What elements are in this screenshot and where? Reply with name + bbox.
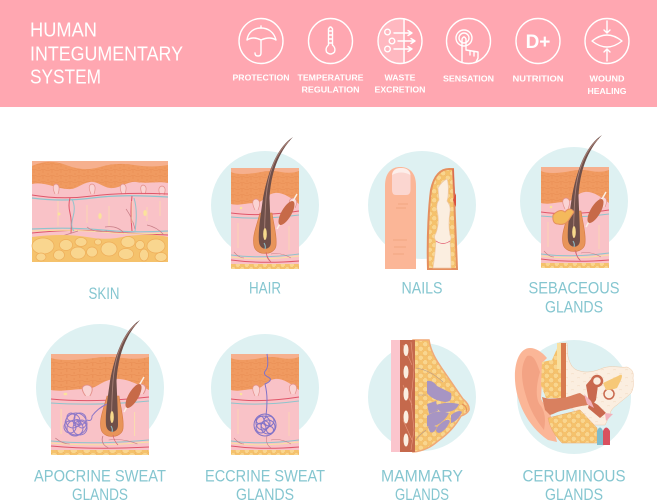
label: nails: NAILS: [402, 278, 442, 298]
icon: thermometer: [308, 18, 352, 64]
label: mammary glands: MAMMARY: [381, 467, 463, 486]
label: temperature regulation: REGULATION: [302, 84, 360, 94]
breast fat: [413, 340, 469, 452]
label: wound healing: HEALING: [588, 86, 627, 96]
panel: skin illustration: [32, 161, 168, 262]
nail: [392, 168, 410, 195]
finger exterior: [385, 167, 416, 269]
title: [30, 20, 183, 88]
label: protection: PROTECTION: [232, 72, 290, 82]
label: eccrine sweat glands: ECCRINE SWEAT: [205, 466, 325, 486]
title: INTEGUMENTARY: [30, 44, 183, 66]
label: temperature regulation: TEMPERATURE: [298, 72, 364, 82]
panel: hair illustration: [211, 137, 319, 269]
icon: wound healing: [585, 18, 629, 64]
finger cross-section: [428, 169, 457, 269]
pinna: [515, 348, 557, 442]
milk lobes: [427, 381, 462, 433]
label: temperature regulation: [298, 72, 364, 94]
eardrum: [584, 394, 594, 408]
upper fat: [541, 344, 563, 398]
bones: [433, 179, 451, 268]
semicircular canals: [592, 376, 602, 386]
papillae: [53, 184, 165, 195]
label: apocrine sweat glands: [34, 466, 166, 500]
stratum corneum: [32, 161, 168, 169]
label: eccrine sweat glands: [205, 466, 325, 500]
label: waste excretion: EXCRETION: [374, 84, 426, 94]
label: ceruminous glands: CERUMINOUS: [522, 467, 626, 486]
icon: protection umbrella: [239, 18, 283, 64]
panel: nails illustration: [368, 151, 476, 269]
panel: apocrine sweat glands illustration: [36, 320, 164, 455]
panel: sebaceous glands illustration: [520, 135, 628, 268]
label: apocrine sweat glands: APOCRINE SWEAT: [34, 466, 166, 486]
label: ceruminous glands: [522, 467, 626, 500]
epidermis layer: [32, 161, 168, 189]
icon: nutrition D+: [516, 18, 560, 64]
fat layer: [32, 235, 168, 262]
label: wound healing: WOUND: [590, 74, 624, 84]
label: nutrition: NUTRITION: [512, 74, 564, 84]
panel: eccrine sweat glands illustration: [211, 334, 319, 455]
blood vessels: [32, 193, 168, 235]
label: wound healing: [588, 74, 627, 96]
chest muscle: [400, 340, 415, 452]
panel: ceruminous glands illustration: [515, 340, 633, 454]
title: HUMAN: [30, 20, 97, 42]
icon: nutrition D+: D+: [526, 32, 550, 53]
label: sebaceous glands: SEBACEOUS: [528, 278, 620, 298]
skin strip: [391, 340, 400, 452]
sweat duct and coil: [254, 354, 276, 436]
temporal bone: [559, 343, 633, 425]
title: SYSTEM: [30, 66, 101, 88]
label: sebaceous glands: [528, 278, 620, 316]
label: hair: HAIR: [249, 278, 281, 298]
label: skin: SKIN: [88, 284, 120, 303]
lower fat: [548, 410, 597, 443]
label: sensation: SENSATION: [443, 74, 494, 84]
nail bed: [453, 169, 455, 205]
panel: mammary glands illustration: [368, 340, 476, 452]
blood vessels: [597, 428, 603, 445]
sebaceous gland: [553, 209, 574, 224]
hair roots: [58, 201, 160, 226]
ear canal: [542, 393, 590, 415]
icon: waste excretion: [378, 18, 422, 64]
icon: sensation finger: [446, 18, 490, 64]
label: waste excretion: WASTE: [384, 72, 416, 82]
label: mammary glands: [381, 467, 463, 500]
auditory nerve: [603, 375, 622, 390]
label: sebaceous glands: GLANDS: [545, 298, 603, 316]
header banner: [0, 0, 657, 107]
coiled gland: [64, 404, 107, 436]
ribs: [404, 344, 408, 446]
label: waste excretion: [374, 72, 426, 94]
